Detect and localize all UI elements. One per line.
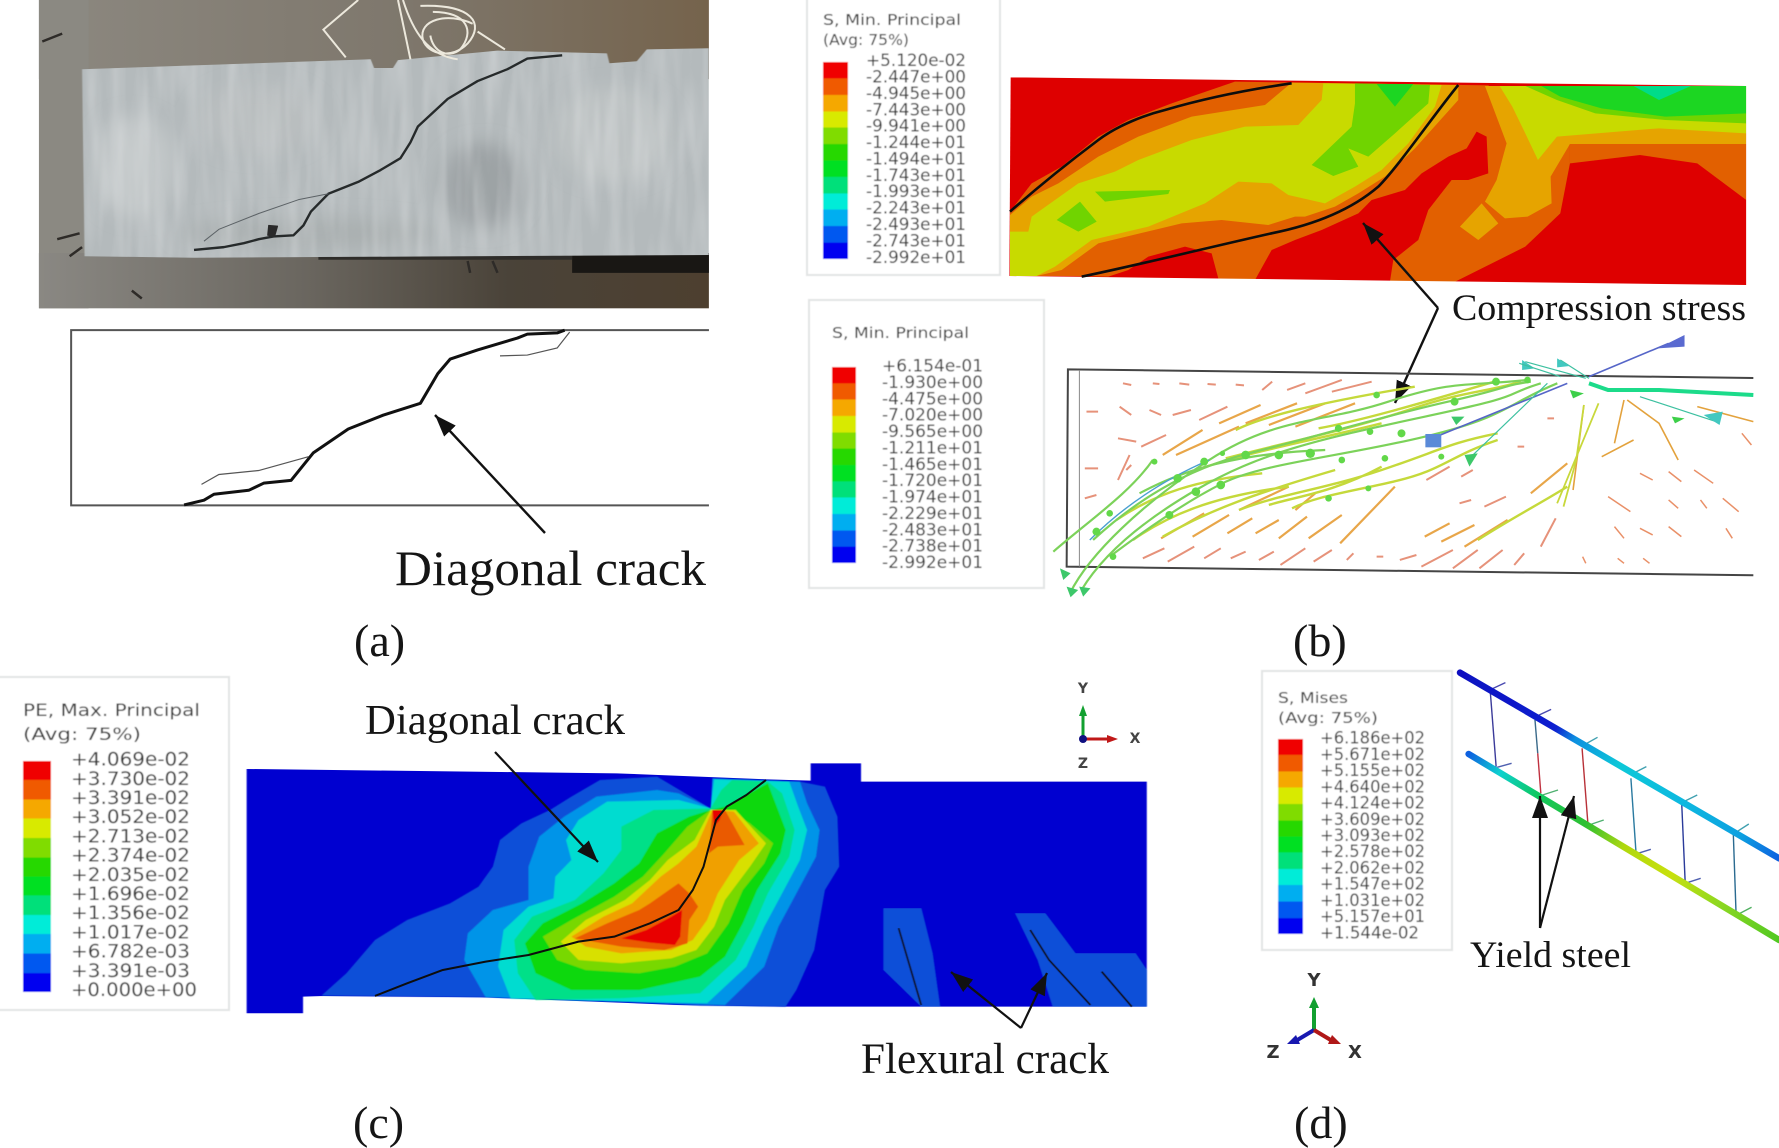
- legend: S, Mises: +2.578e+02: [1320, 842, 1425, 862]
- panel d: steel reinforcement stress: [1262, 671, 1779, 1148]
- axis triad: XYZ: Y: [1306, 970, 1321, 991]
- arrow: diagonal crack sketch: [435, 415, 545, 533]
- legend: S, Min. Principal contour: -2.243e+01: [866, 198, 966, 218]
- legend: S, Min. Principal contour: [807, 0, 1000, 275]
- panel a: test specimen photo and crack sketch: [39, 0, 709, 666]
- legend: S, Mises: +4.124e+02: [1320, 794, 1425, 814]
- legend: S, Mises: +2.062e+02: [1320, 858, 1425, 878]
- contour plot: beam plastic strain with cracks: [247, 763, 1147, 1013]
- legend: S, Min. Principal vectors: -2.229e+01: [882, 504, 983, 524]
- legend: S, Min. Principal contour: -9.941e+00: [866, 116, 966, 136]
- label: Flexural crack: Flexural crack: [861, 1036, 1110, 1083]
- legend: S, Mises: +5.155e+02: [1320, 761, 1425, 781]
- legend: S, Mises: +5.157e+01: [1320, 907, 1425, 927]
- legend: PE, Max. Principal: +1.696e-02: [71, 883, 190, 905]
- axis triad: XYZ: Z: [1078, 756, 1088, 772]
- arrows: compression stress: [1363, 223, 1438, 403]
- legend: S, Mises: +1.544e-02: [1320, 924, 1419, 944]
- label: Yield steel: Yield steel: [1470, 935, 1631, 976]
- axis triad: XYZ: Y: [1077, 681, 1089, 697]
- arrows: flexural crack pointers: [951, 972, 1047, 1028]
- legend: S, Min. Principal vectors: -2.483e+01: [882, 520, 983, 540]
- caption (b): (b): [1293, 615, 1347, 666]
- legend: PE, Max. Principal: +3.391e-02: [71, 787, 190, 809]
- legend: S, Min. Principal contour: S, Min. Principal: [823, 11, 961, 29]
- legend: S, Min. Principal contour: -1.244e+01: [866, 133, 966, 153]
- legend: S, Mises: +1.547e+02: [1320, 874, 1425, 894]
- legend: S, Min. Principal vectors: S, Min. Principal: [832, 324, 969, 342]
- legend: PE, Max. Principal: +6.782e-03: [71, 940, 190, 962]
- ticks: [1491, 683, 1752, 915]
- legend: S, Mises: +3.093e+02: [1320, 826, 1425, 846]
- reinforcement cage with stress colours: [1460, 673, 1779, 940]
- legend: S, Min. Principal contour: -2.493e+01: [866, 215, 966, 235]
- legend: S, Min. Principal vectors: -1.974e+01: [882, 488, 983, 508]
- legend: S, Min. Principal vectors: -2.738e+01: [882, 536, 983, 556]
- legend: S, Min. Principal vectors: -4.475e+00: [882, 390, 983, 410]
- legend: PE, Max. Principal: [0, 677, 229, 1010]
- legend: S, Min. Principal contour: -4.945e+00: [866, 84, 966, 104]
- vector plot: principal stress directions: [1053, 335, 1753, 597]
- crack sketch outline: [71, 330, 709, 505]
- legend: PE, Max. Principal: +3.730e-02: [71, 768, 190, 790]
- beam body and flexural zones: [247, 763, 1147, 1013]
- legend: S, Min. Principal contour: -2.447e+00: [866, 68, 966, 88]
- legend: S, Min. Principal contour: -2.992e+01: [866, 248, 966, 268]
- caption (a): (a): [354, 615, 405, 666]
- legend: PE, Max. Principal: +2.374e-02: [71, 844, 190, 866]
- wires: [323, 0, 505, 59]
- dark specks: [42, 34, 497, 299]
- legend: S, Min. Principal contour: (Avg: 75%): [823, 31, 909, 49]
- legend: S, Min. Principal vectors: +6.154e-01: [882, 356, 983, 376]
- legend: S, Min. Principal contour: -2.743e+01: [866, 232, 966, 252]
- legend: S, Min. Principal vectors: -1.720e+01: [882, 471, 983, 491]
- legend: PE, Max. Principal: +1.017e-02: [71, 922, 190, 944]
- legend: S, Mises: +6.186e+02: [1320, 728, 1425, 748]
- axis triad: XYZ: X: [1348, 1042, 1362, 1063]
- photo of cracked concrete beam: [39, 0, 709, 308]
- legend: S, Mises: +1.031e+02: [1320, 891, 1425, 911]
- legend: PE, Max. Principal: +0.000e+00: [71, 979, 197, 1001]
- contour plot: minimum principal stress with crack lines: [1005, 70, 1752, 290]
- panel b: compression stress contours and vectors: [807, 0, 1753, 666]
- legend: S, Min. Principal contour: -1.743e+01: [866, 166, 966, 186]
- legend: PE, Max. Principal: PE, Max. Principal: [23, 701, 200, 721]
- legend: S, Min. Principal vectors: [809, 300, 1044, 588]
- crack: [194, 55, 562, 250]
- legend: S, Mises: S, Mises: [1278, 689, 1348, 707]
- crack lines: [1010, 83, 1292, 212]
- left and central vector field: [1053, 363, 1567, 597]
- central strain contours and diagonal crack: [321, 777, 839, 1007]
- legend: S, Min. Principal contour: -1.494e+01: [866, 150, 966, 170]
- axis triad: XYZ: X: [1130, 731, 1141, 747]
- longitudinal bars: [1460, 673, 1779, 858]
- panel c: plastic strain contour: [0, 677, 1147, 1148]
- axis triad: XYZ: [1266, 970, 1362, 1063]
- legend: PE, Max. Principal: +2.713e-02: [71, 826, 190, 848]
- legend: S, Min. Principal vectors: -1.465e+01: [882, 455, 983, 475]
- legend: S, Min. Principal vectors: -7.020e+00: [882, 406, 983, 426]
- legend: S, Mises: (Avg: 75%): [1278, 709, 1378, 727]
- legend: S, Mises: +4.640e+02: [1320, 778, 1425, 798]
- legend: S, Min. Principal contour: -1.993e+01: [866, 182, 966, 202]
- legend: PE, Max. Principal: +3.052e-02: [71, 806, 190, 828]
- legend: S, Min. Principal vectors: -1.930e+00: [882, 373, 983, 393]
- axis triad: XYZ: [1077, 681, 1141, 772]
- legend: S, Min. Principal contour: +5.120e-02: [866, 51, 966, 71]
- label: Diagonal crack: Diagonal crack: [395, 540, 706, 596]
- caption (c): (c): [353, 1097, 404, 1148]
- arrows: yield steel pointers: [1540, 796, 1574, 928]
- caption (d): (d): [1294, 1097, 1348, 1148]
- legend: PE, Max. Principal: +1.356e-02: [71, 902, 190, 924]
- legend: PE, Max. Principal: +4.069e-02: [71, 748, 190, 770]
- legend: PE, Max. Principal: +3.391e-03: [71, 960, 190, 982]
- legend: S, Min. Principal vectors: -2.992e+01: [882, 553, 983, 573]
- beam outline and right-hand vectors: [1067, 335, 1753, 575]
- axis triad: XYZ: Z: [1266, 1042, 1280, 1063]
- legend: S, Min. Principal contour: -7.443e+00: [866, 100, 966, 120]
- stirrups: [1490, 692, 1736, 915]
- arrow: diagonal crack pointer: [495, 752, 598, 862]
- legend: S, Mises: [1262, 671, 1452, 950]
- legend: S, Min. Principal vectors: -9.565e+00: [882, 422, 983, 442]
- legend: PE, Max. Principal: +2.035e-02: [71, 864, 190, 886]
- legend: S, Mises: +5.671e+02: [1320, 745, 1425, 765]
- legend: S, Min. Principal vectors: -1.211e+01: [882, 438, 983, 458]
- legend: S, Mises: +3.609e+02: [1320, 810, 1425, 830]
- label: Compression stress: Compression stress: [1452, 288, 1746, 329]
- label: Diagonal crack: Diagonal crack: [365, 698, 625, 744]
- legend: PE, Max. Principal: (Avg: 75%): [23, 725, 141, 745]
